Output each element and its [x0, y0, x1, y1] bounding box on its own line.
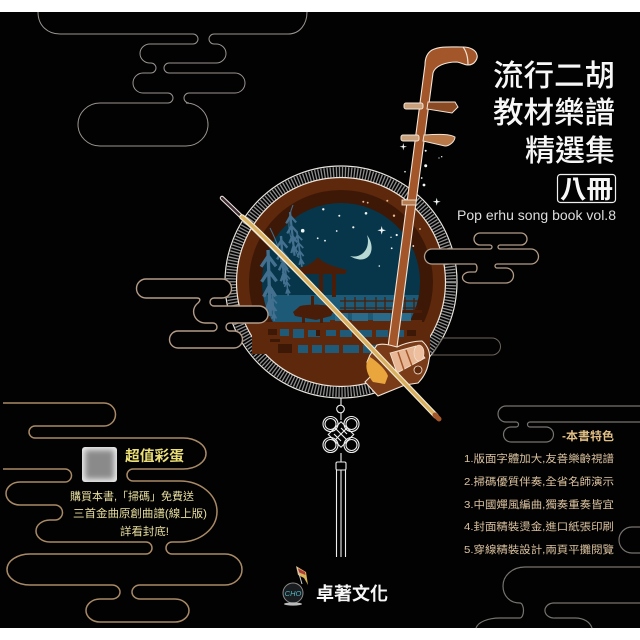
lake and lower scene: [263, 295, 419, 322]
book features list: [464, 452, 615, 556]
tuning peg upper: [404, 102, 458, 113]
volume badge: 八冊: [560, 176, 613, 204]
book features list: 2.掃碼優質伴奏,全省名師演示: [464, 475, 615, 488]
hanging knot ornament: [323, 398, 359, 557]
cloud outline: bottom right upper: [498, 406, 640, 442]
cloud: lower right of medallion: [432, 338, 500, 355]
willow branches: [261, 205, 306, 321]
title: 精選集: [525, 135, 615, 168]
dark inner shadow ring: [249, 190, 433, 322]
title: 流行二胡: [493, 60, 615, 93]
floor with blue tiles: [252, 322, 430, 354]
cloud outline: top left: [38, 12, 307, 146]
cloud: left overlapping medallion: [136, 279, 268, 348]
book features list: 5.穿線精裝設計,兩頁平攤閱覽: [464, 543, 615, 556]
title: 教材樂譜: [493, 97, 615, 130]
head band: [463, 47, 468, 65]
stars: [301, 143, 442, 267]
tuning peg lower: [401, 134, 455, 146]
ticked outer ring: [225, 166, 457, 398]
crescent moon: [350, 235, 372, 260]
deck and railing: [330, 297, 422, 323]
medallion: moonlit pavilion scene: [225, 143, 457, 398]
cloud: right overlapping medallion: [425, 233, 538, 283]
book features list: 3.中國嬋風編曲,獨奏重奏皆宜: [464, 498, 614, 511]
logo icon: music note globe: CHO: [285, 589, 301, 598]
bonus description: 詳看封底!: [120, 524, 169, 538]
publisher logo: [283, 566, 388, 606]
cloud outline: bottom left: [3, 403, 242, 622]
logo wordmark: 卓著文化: [316, 583, 388, 604]
bonus description: 三首金曲原創曲譜(線上版): [73, 506, 207, 520]
endless knot: [323, 416, 359, 452]
string loop on neck: [402, 200, 416, 205]
erhu bow: [222, 198, 439, 419]
bow hair: [242, 217, 436, 416]
cord and bead: [337, 398, 344, 420]
bonus description: 購買本書,「掃碼」免費送: [70, 489, 194, 503]
cloud outline: bottom right small: [619, 527, 640, 553]
bonus description: [70, 489, 207, 538]
erhu instrument: [365, 47, 477, 396]
book features heading: -本書特色: [562, 429, 615, 443]
QR code placeholder: [82, 447, 117, 482]
bow tip: [435, 415, 439, 419]
tassel: [336, 453, 346, 557]
bow stick: [222, 198, 438, 418]
pavilion silhouette: [293, 257, 347, 323]
erhu neck and scroll head: [388, 47, 477, 347]
title: [493, 60, 615, 168]
bonus heading: 超值彩蛋: [125, 447, 185, 465]
night sky window: [262, 203, 420, 322]
book features list: 1.版面字體加大,友善樂齡視譜: [464, 452, 615, 465]
cloud outline: bottom right lower: [476, 567, 640, 628]
book features list: 4.封面精裝燙金,進口紙張印刷: [464, 520, 614, 533]
subtitle: Pop erhu song book vol.8: [457, 207, 616, 223]
erhu sound body: [365, 341, 430, 396]
